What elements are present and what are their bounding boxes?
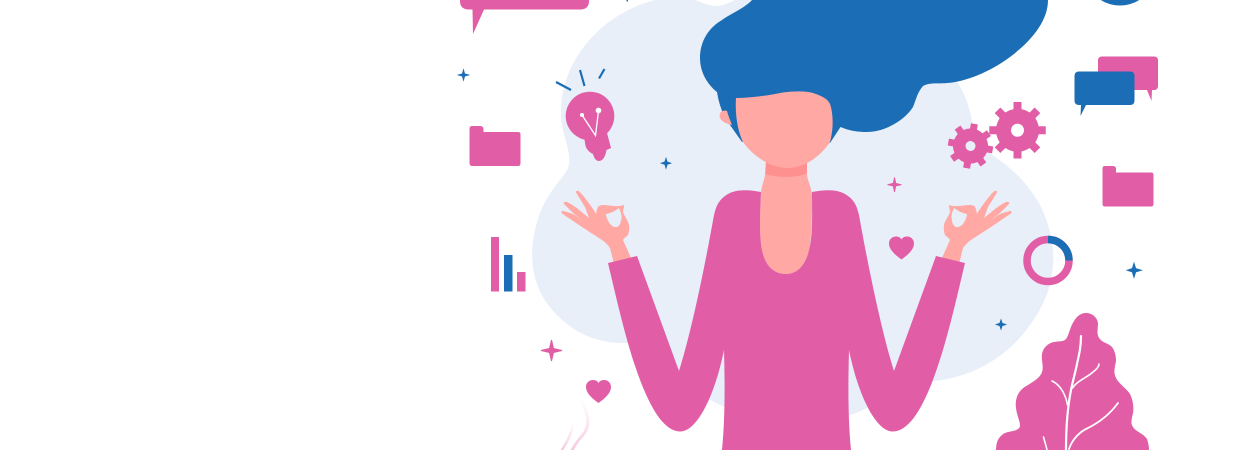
folder: right — [1102, 166, 1154, 206]
icon: lightbulb — [556, 69, 614, 161]
ear — [720, 110, 732, 125]
icon: large gear — [989, 102, 1046, 158]
face — [736, 91, 833, 168]
lightbulb filament — [581, 108, 601, 136]
left hand — [561, 191, 632, 264]
right hand — [941, 191, 1012, 264]
steam wisps — [562, 400, 588, 450]
folder: left — [470, 126, 520, 166]
neck shadow — [766, 160, 807, 177]
hair — [700, 0, 1048, 143]
neck and chest skin — [760, 160, 812, 274]
heart: right — [889, 236, 914, 260]
star: blue lower — [996, 320, 1006, 330]
background blob — [532, 0, 1053, 424]
star: blue centre — [661, 158, 671, 168]
leaf — [996, 313, 1149, 450]
heart: left — [586, 380, 611, 403]
speech bubble: top right partial circle — [1089, 0, 1151, 6]
icon: small gear — [944, 120, 997, 172]
star: pink centre right — [888, 178, 902, 192]
left hand finger loop — [606, 208, 622, 227]
star: blue right — [1127, 263, 1142, 278]
pink speech bubble — [1098, 56, 1158, 101]
star: blue left — [458, 70, 469, 80]
donut chart — [1027, 240, 1069, 282]
bar chart — [491, 237, 526, 292]
leaf veins — [1044, 336, 1118, 450]
plant — [996, 313, 1149, 450]
blue speech bubble — [1074, 72, 1134, 116]
right hand finger loop — [951, 208, 967, 227]
speech bubble: top left — [460, 0, 589, 34]
lightbulb rays — [556, 69, 604, 90]
sweater — [608, 190, 965, 450]
speech bubbles: right — [1074, 56, 1158, 116]
star: pink left — [541, 340, 562, 361]
tiny blue speck at top edge — [626, 0, 628, 2]
lightbulb body — [566, 92, 614, 161]
woman figure — [561, 0, 1048, 450]
